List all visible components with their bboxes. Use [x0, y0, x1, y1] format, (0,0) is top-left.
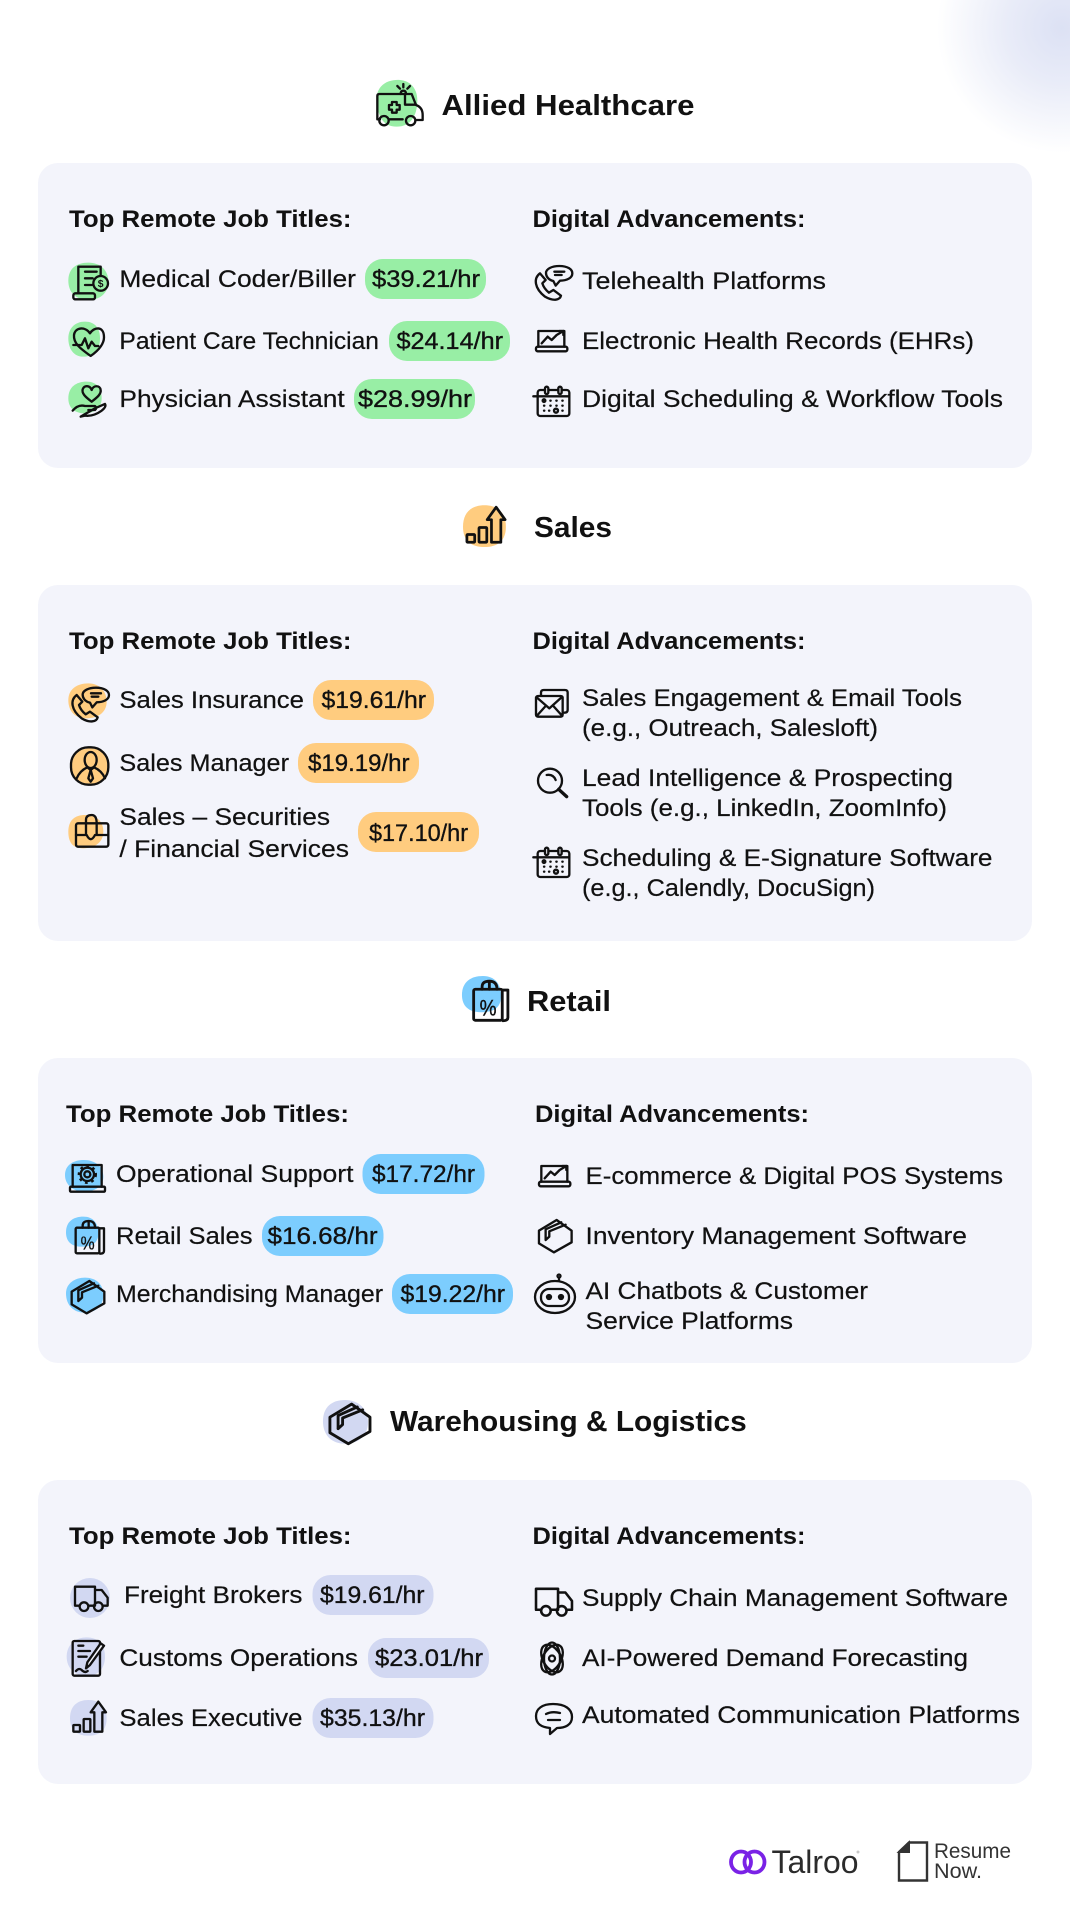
wage pill: $19.61/hr: [320, 1582, 424, 1609]
heading: Sales: [463, 505, 612, 547]
advancement: AI Chatbots: [535, 1274, 868, 1335]
job row: Medical Coder/Biller: [68, 259, 486, 300]
advancement: Telehealth Platforms: [536, 266, 826, 300]
job row: Sales Securities / Financial Services: [68, 804, 479, 863]
job row: Sales Manager: [70, 743, 419, 785]
label: Scheduling & E-Signature Software: [582, 845, 992, 872]
icon: phone with speech bubble: [536, 266, 572, 300]
icon: box: [539, 1220, 572, 1252]
job row: Patient Care Technician: [68, 321, 510, 361]
wage pill: $17.10/hr: [369, 820, 468, 847]
icon: calendar: [533, 848, 569, 877]
wage pill: [312, 1698, 434, 1738]
wage pill: $16.68/hr: [268, 1223, 378, 1250]
job title: Sales Executive: [119, 1705, 302, 1732]
icon: laptop with gear: [65, 1160, 105, 1192]
icon: bill document: [68, 263, 108, 300]
job row: Physician Assistant: [68, 379, 475, 419]
job title: Patient Care Technician: [119, 328, 379, 355]
column heading: digital advancements: Digital Advancements:: [532, 206, 806, 233]
column heading: job titles: Top Remote Job Titles:: [69, 628, 352, 655]
icon: robot: [535, 1274, 575, 1313]
icon: laptop chart: [536, 331, 567, 351]
label: Automated Communication Platforms: [582, 1702, 1020, 1729]
label: Electronic Health Records (EHRs): [582, 328, 974, 355]
panel: Warehousing card: [38, 1480, 1032, 1784]
advancement: Inventory Management: [539, 1220, 967, 1252]
job row: Customs Operations: [67, 1637, 489, 1678]
wage pill: $39.21/hr: [372, 266, 480, 293]
wage pill: $28.99/hr: [358, 386, 472, 413]
job row: Retail Sales: [66, 1216, 384, 1256]
job row: Freight Brokers: [70, 1575, 434, 1618]
job title: Freight Brokers: [124, 1582, 302, 1609]
wage pill: [312, 1575, 434, 1615]
wage pill: [298, 743, 419, 783]
wage pill: [365, 259, 486, 299]
job title: Sales Manager: [119, 750, 289, 777]
job row: Sales Executive: [70, 1698, 434, 1738]
icon: magnifier: [538, 769, 567, 797]
heading: Retail: [462, 976, 611, 1021]
job row: Operational Support: [65, 1154, 484, 1194]
icon: document and pen: [67, 1637, 105, 1676]
icon: hand holding heart: [68, 382, 105, 417]
wage pill: $19.19/hr: [308, 750, 410, 777]
label: Supply Chain Management Software: [582, 1585, 1008, 1612]
column heading: job titles: Top Remote Job Titles:: [69, 1523, 352, 1550]
advancement: E-commerce: [539, 1163, 1003, 1190]
label: Tools (e.g., LinkedIn, ZoomInfo): [582, 795, 947, 822]
wage pill: $35.13/hr: [320, 1705, 425, 1732]
logo: Resume Now: Resume: [934, 1840, 1011, 1863]
icon: calendar: [533, 387, 569, 416]
heading: Allied Healthcare: [377, 80, 694, 127]
panel: Allied Healthcare card: [38, 163, 1032, 468]
wage pill: $23.01/hr: [375, 1645, 483, 1672]
icon: shopping bag: %: [480, 995, 497, 1020]
icon: truck: [70, 1578, 110, 1618]
heading text: Sales: [534, 512, 612, 544]
icon: heart with pulse: [68, 322, 104, 357]
wage pill: [262, 1216, 384, 1256]
wage pill: $17.72/hr: [372, 1161, 475, 1188]
icon: growth chart: [463, 505, 506, 547]
column heading: digital advancements: Digital Advancements:: [532, 628, 806, 655]
label: (e.g., Calendly, DocuSign): [582, 875, 875, 902]
logo: Resume Now: Now.: [934, 1860, 982, 1883]
label: Telehealth Platforms: [582, 268, 826, 295]
advancement: Supply Chain: [536, 1585, 1008, 1616]
icon: ambulance: [377, 80, 423, 127]
label: E-commerce & Digital POS Systems: [586, 1163, 1003, 1190]
label: (e.g., Outreach, Salesloft): [582, 715, 878, 742]
wage pill: [313, 680, 434, 720]
advancement: AI-Powered Forecasting: [537, 1641, 968, 1676]
icon: box: [323, 1400, 370, 1444]
advancement: Electronic Health Records: [536, 328, 974, 355]
job title: Sales Insurance: [119, 687, 304, 714]
job title: Retail Sales: [116, 1223, 252, 1250]
label: Service Platforms: [586, 1308, 793, 1335]
icon: person in circle: [70, 747, 109, 785]
icon: bill document: $: [98, 279, 104, 290]
section: Warehousing & Logistics: [38, 1400, 1032, 1784]
label: Lead Intelligence & Prospecting: [582, 765, 953, 792]
advancement: Scheduling & E-Signature: [533, 845, 992, 902]
label: [582, 685, 962, 742]
heading: Warehousing & Logistics: [323, 1400, 747, 1444]
label: AI-Powered Demand Forecasting: [582, 1645, 968, 1672]
advancement: Sales Engagement: [536, 685, 962, 742]
wage pill: [392, 1274, 513, 1314]
wage pill: [362, 1154, 484, 1194]
job row: Sales Insurance: [68, 680, 434, 721]
label: AI Chatbots & Customer: [586, 1278, 868, 1305]
label: [582, 765, 953, 822]
job title: Operational Support: [116, 1161, 354, 1188]
column heading: digital advancements: Digital Advancements:: [535, 1101, 809, 1128]
label: Digital Scheduling & Workflow Tools: [582, 386, 1003, 413]
icon: shopping bag: [462, 976, 508, 1021]
icon: box: [66, 1278, 104, 1313]
section: Sales: [38, 505, 1032, 941]
wage pill: [358, 812, 479, 852]
heading text: Allied Healthcare: [442, 90, 694, 122]
job title: / Financial Services: [119, 836, 349, 863]
job title: [119, 804, 349, 863]
icon: shopping bag: %: [81, 1232, 95, 1253]
logo: Talroo: Talroo: [772, 1844, 858, 1880]
icon: truck: [536, 1589, 572, 1616]
icon: chat bubble: [536, 1704, 572, 1734]
panel: Retail card: [38, 1058, 1032, 1363]
job title: Sales – Securities: [119, 804, 330, 831]
section: Allied Healthcare: [38, 80, 1032, 468]
wage pill: [354, 379, 475, 419]
icon: phone with speech bubble: [68, 683, 109, 721]
wage pill: $19.61/hr: [322, 687, 426, 714]
heading text: Warehousing & Logistics: [390, 1406, 747, 1438]
job row: Merchandising Manager: [66, 1274, 513, 1314]
icon: laptop chart: [539, 1166, 570, 1186]
job title: Medical Coder/Biller: [119, 266, 356, 293]
icon: growth chart: [70, 1700, 107, 1736]
icon: briefcase: [68, 815, 108, 848]
column heading: job titles: Top Remote Job Titles:: [69, 206, 352, 233]
icon: atom: [537, 1641, 567, 1676]
wage pill: $19.22/hr: [400, 1281, 505, 1308]
job title: Merchandising Manager: [116, 1281, 383, 1308]
advancement: Automated Communication: [536, 1702, 1020, 1734]
panel: Sales card: [38, 585, 1032, 941]
logo: Resume Now: [899, 1840, 1011, 1883]
wage pill: [368, 1638, 489, 1678]
advancement: Digital Scheduling: [533, 386, 1003, 416]
job title: Customs Operations: [119, 1645, 358, 1672]
icon: envelopes: [536, 690, 568, 717]
label: Inventory Management Software: [586, 1223, 967, 1250]
logo: Talroo: [731, 1844, 860, 1880]
label: [586, 1278, 868, 1335]
label: Sales Engagement & Email Tools: [582, 685, 962, 712]
column heading: digital advancements: Digital Advancements:: [532, 1523, 806, 1550]
section: Retail: [38, 976, 1032, 1363]
wage pill: [389, 321, 510, 361]
job title: Physician Assistant: [119, 386, 345, 413]
label: [582, 845, 992, 902]
wage pill: $24.14/hr: [396, 328, 503, 355]
decorative corner glow: [900, 0, 1070, 160]
heading text: Retail: [527, 986, 611, 1018]
advancement: Lead Intelligence: [538, 765, 953, 822]
column heading: job titles: Top Remote Job Titles:: [66, 1101, 349, 1128]
icon: shopping bag: [66, 1217, 104, 1254]
